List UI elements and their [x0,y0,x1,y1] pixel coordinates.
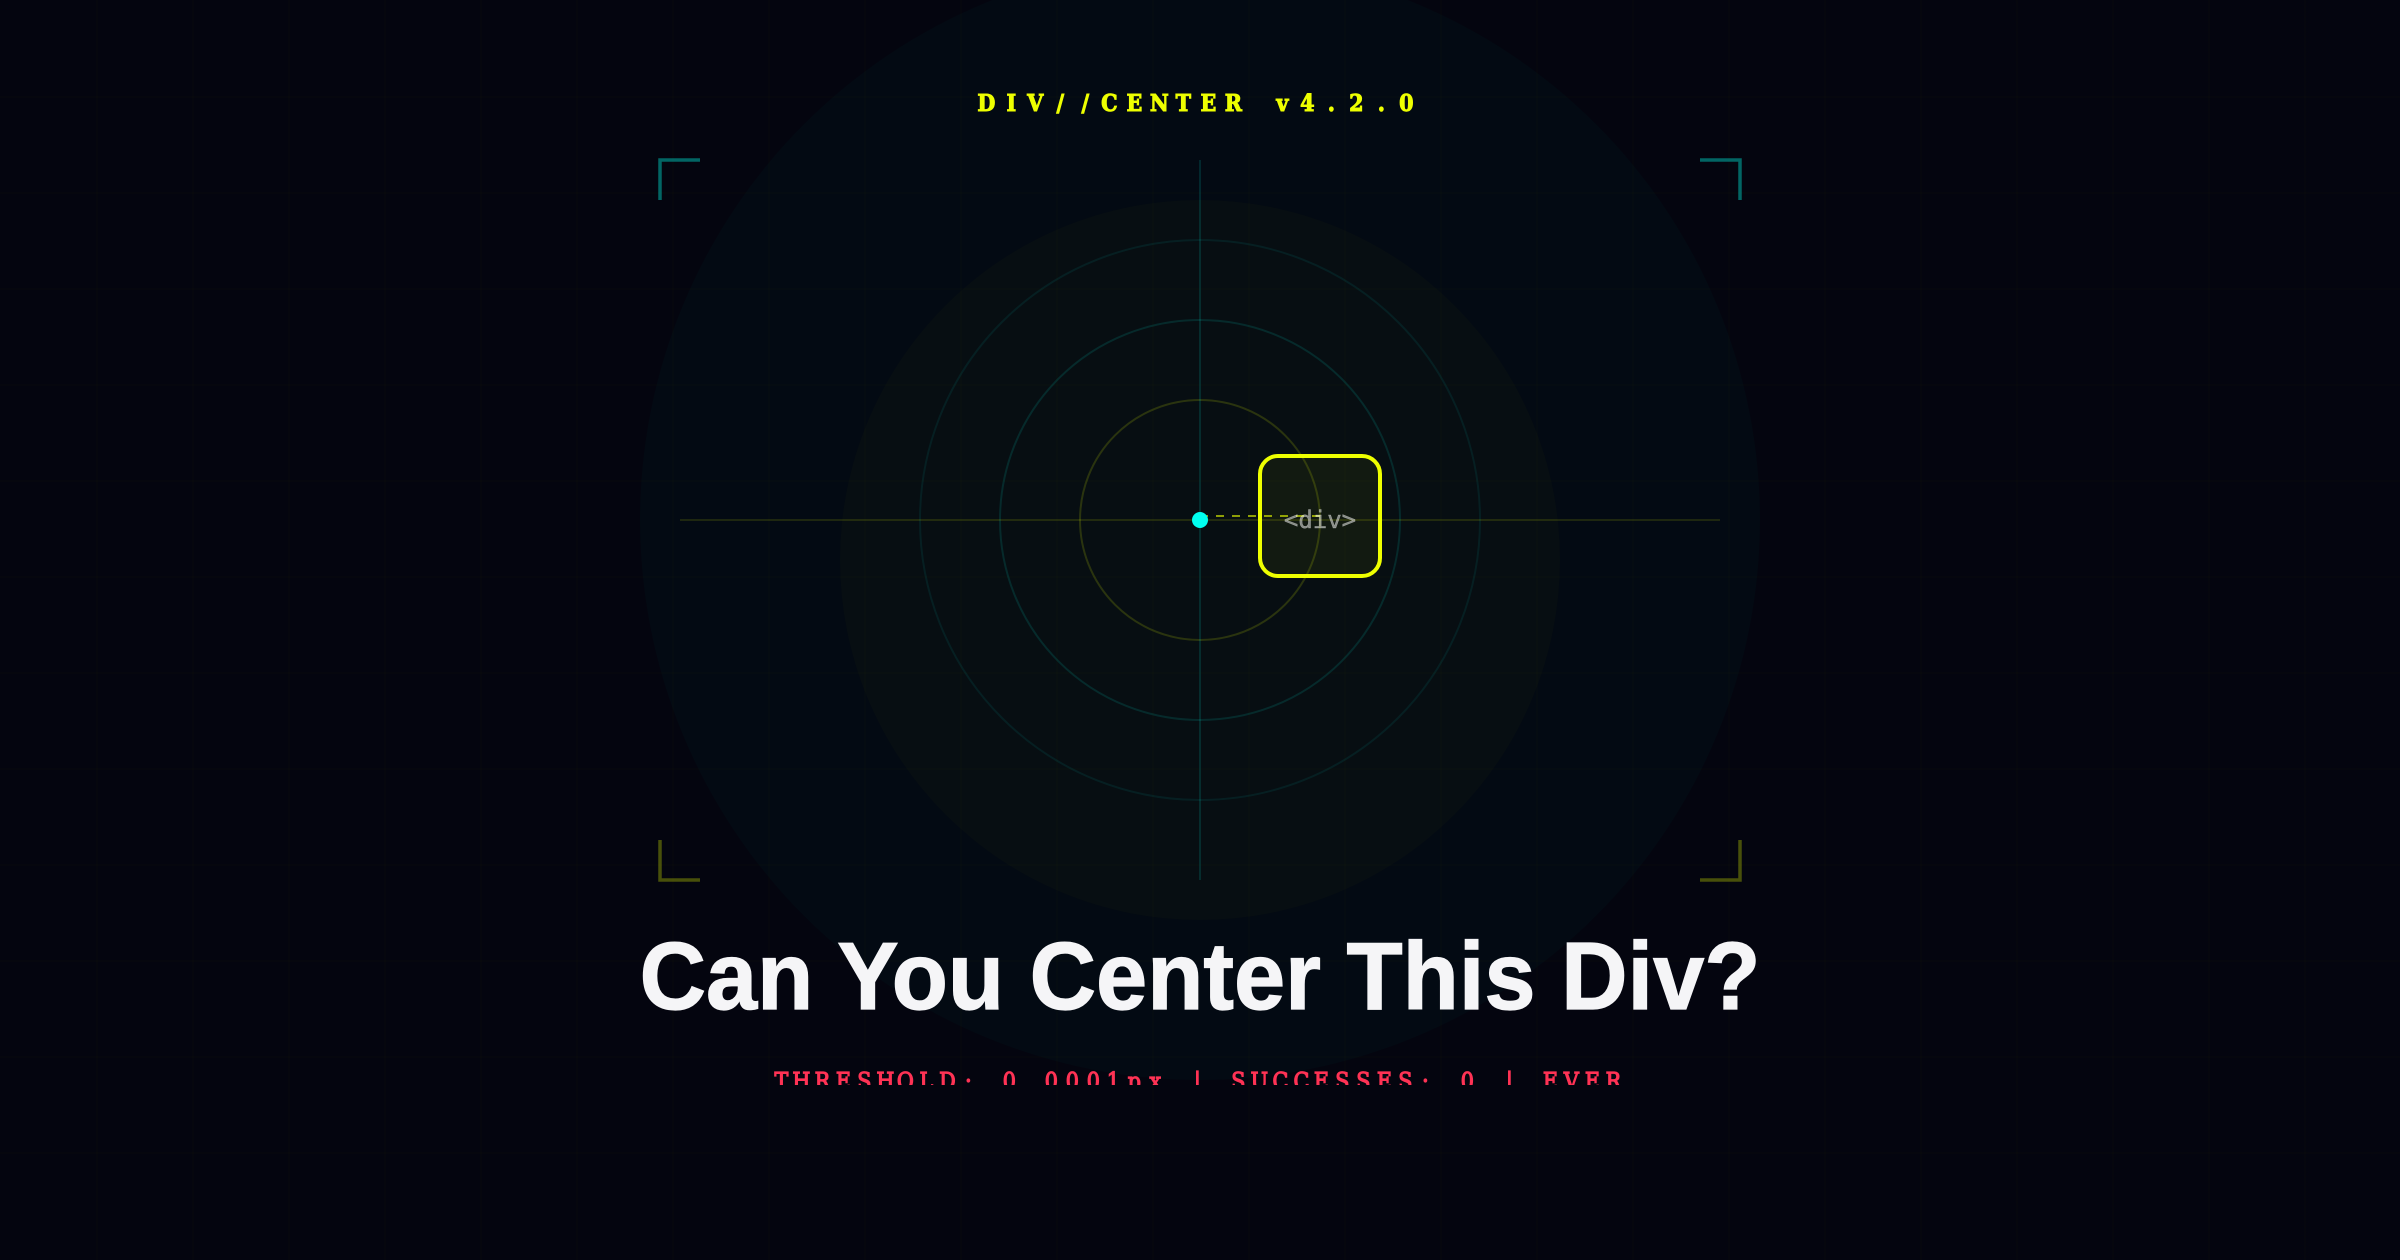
crosshair vertical line [1199,160,1201,880]
outer glow circle [640,0,1760,1080]
div label: <div> [1284,506,1356,534]
corner bracket: bottom left [660,840,700,880]
header label: 0 [1399,90,1413,117]
header label: / [1081,90,1089,117]
header label: . [1378,90,1385,117]
target div box [1260,456,1380,576]
concentric rings [920,240,1480,800]
header label: V [1027,90,1044,117]
header label: T [1176,90,1191,117]
header label: N [1150,90,1168,117]
header label: / [1056,90,1064,117]
corner bracket: top left [660,160,700,200]
dashed offset line [1200,515,1320,517]
header label: E [1126,90,1142,117]
header label: 2 [1349,90,1364,117]
title: Can You Center This Div? [640,923,1760,1030]
header label: R [1224,90,1242,117]
header label: 4 [1300,90,1314,117]
header label: I [1006,90,1016,117]
inner glow circle [840,200,1560,920]
corner bracket: top right [1700,160,1740,200]
header label: D [977,90,995,117]
corner bracket: bottom right [1700,840,1740,880]
header label: v [1276,90,1288,117]
header label: C [1101,90,1118,117]
center dot [1192,512,1208,528]
clipped subtitle [774,1069,1621,1085]
crosshair horizontal line [680,519,1720,521]
header label: . [1328,90,1335,117]
header label: E [1200,90,1216,117]
header label [977,90,1413,117]
